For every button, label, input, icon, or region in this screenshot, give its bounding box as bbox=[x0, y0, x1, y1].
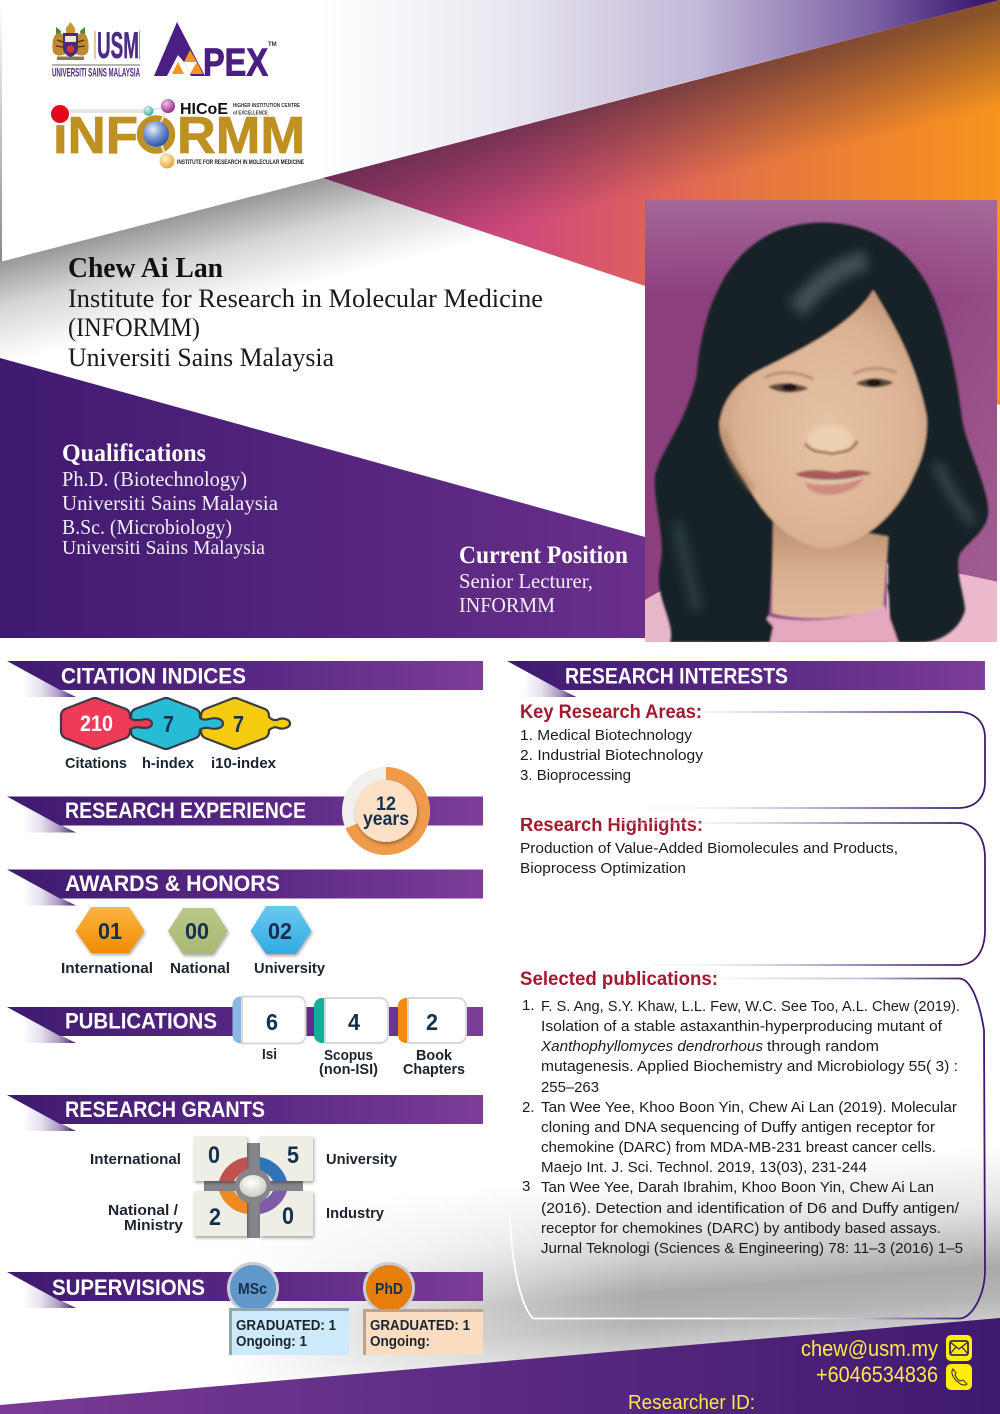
national hexagon bbox=[168, 908, 228, 954]
icon: A triangle bbox=[154, 22, 205, 76]
university value: 5 bbox=[287, 1142, 299, 1169]
area 3: 3. Bioprocessing bbox=[520, 767, 631, 784]
i10-index label: i10-index bbox=[211, 755, 277, 772]
card: ISI bbox=[232, 996, 306, 1044]
teal sphere bbox=[144, 106, 154, 116]
heading: Selected publications: bbox=[520, 969, 718, 990]
section: citation indices bbox=[7, 661, 483, 772]
publication 1: through random bbox=[767, 1038, 879, 1055]
publication 1: Xanthophyllomyces dendrorhous bbox=[540, 1038, 764, 1055]
university name: UNIVERSITI SAINS MALAYSIA bbox=[52, 66, 140, 80]
university value: 02 bbox=[268, 918, 292, 944]
non-ISI label: (non-ISI) bbox=[319, 1061, 378, 1078]
heading: Key Research Areas: bbox=[520, 702, 702, 723]
section: awards and honors bbox=[7, 870, 483, 977]
university hexagon bbox=[250, 906, 312, 954]
MSc text: MSc bbox=[238, 1281, 267, 1298]
area 2: 2. Industrial Biotechnology bbox=[520, 747, 704, 764]
trademark: TM bbox=[268, 42, 277, 48]
grants quadrant chart bbox=[194, 1136, 313, 1238]
ribbon bbox=[7, 870, 483, 906]
publication 3: receptor for chemokines (DARC) by antibody based assays. bbox=[541, 1220, 941, 1237]
university: Universiti Sains Malaysia bbox=[68, 343, 334, 372]
citations label: Citations bbox=[65, 755, 127, 772]
ribbon bbox=[507, 661, 985, 697]
logo: Universiti Sains Malaysia bbox=[52, 22, 140, 80]
PhD ongoing: Ongoing: bbox=[370, 1334, 430, 1350]
international hexagon bbox=[76, 907, 144, 953]
ribbon bbox=[7, 1272, 483, 1308]
PhD degree: Ph.D. (Biotechnology) bbox=[62, 467, 247, 491]
BSc degree: B.Sc. (Microbiology) bbox=[62, 515, 232, 539]
industry value: 0 bbox=[282, 1203, 294, 1230]
i10-index value: 7 bbox=[233, 711, 244, 737]
publication 2: Tan Wee Yee, Khoo Boon Yin, Chew Ai Lan (2019). Molecular bbox=[541, 1099, 957, 1116]
HICoE: HICoE bbox=[180, 101, 228, 118]
heading: AWARDS & HONORS bbox=[65, 871, 280, 896]
background: magenta to orange wedge bbox=[323, 0, 1000, 405]
donut: 12 years bbox=[342, 767, 430, 855]
list number 1: 1. bbox=[522, 997, 535, 1014]
vertical rule left bbox=[94, 31, 96, 59]
BSc university: Universiti Sains Malaysia bbox=[62, 537, 265, 559]
MSc badge bbox=[228, 1264, 278, 1312]
publication 3 bbox=[541, 1179, 963, 1257]
Book label: Book bbox=[416, 1047, 453, 1064]
qualifications heading: Qualifications bbox=[62, 440, 206, 467]
heading: RESEARCH INTERESTS bbox=[565, 664, 788, 688]
publication 3: (2016). Detection and identification of D6 and Duffy antigen/ bbox=[541, 1200, 960, 1217]
box outline bbox=[610, 823, 985, 965]
gold sphere bbox=[160, 154, 174, 168]
heading: Research Highlights: bbox=[520, 815, 703, 836]
PhD badge bbox=[364, 1264, 414, 1312]
university label: University bbox=[326, 1151, 398, 1168]
icon: envelope bbox=[946, 1335, 972, 1361]
international label: International bbox=[90, 1151, 181, 1168]
publication 2: chemokine (DARC) from MDA-MB-231 breast cancer cells. bbox=[541, 1139, 936, 1156]
letters RMM: RMM bbox=[177, 107, 305, 165]
section: publications bbox=[7, 996, 483, 1078]
PhD graduated: GRADUATED: 1 bbox=[370, 1318, 470, 1334]
PhD details bbox=[363, 1309, 483, 1355]
ISI label: Isi bbox=[262, 1046, 277, 1063]
h-index hexagon bbox=[131, 698, 223, 749]
publication 2: Maejo Int. J. Sci. Technol. 2019, 13(03), 231-244 bbox=[541, 1159, 867, 1176]
ribbon bbox=[7, 661, 483, 697]
background: left grey edge strip bbox=[0, 0, 2, 262]
international label: International bbox=[61, 960, 153, 977]
publication 1: 255–263 bbox=[541, 1079, 599, 1096]
publication 1 bbox=[540, 998, 960, 1096]
international value: 0 bbox=[208, 1142, 220, 1169]
heading: PUBLICATIONS bbox=[65, 1008, 217, 1034]
list number 3: 3 bbox=[522, 1178, 530, 1195]
PhD text: PhD bbox=[375, 1281, 403, 1298]
blue sphere bbox=[143, 121, 169, 147]
section: supervisions bbox=[7, 1264, 483, 1355]
area 1: 1. Medical Biotechnology bbox=[520, 727, 693, 744]
university label: University bbox=[254, 960, 326, 977]
red dot bbox=[51, 105, 69, 123]
Scopus value: 4 bbox=[348, 1009, 360, 1035]
magenta sphere bbox=[161, 99, 175, 113]
box outline left bbox=[510, 1215, 700, 1318]
h-index value: 7 bbox=[163, 711, 174, 737]
industry label: Industry bbox=[326, 1205, 385, 1222]
MSc graduated: GRADUATED: 1 bbox=[236, 1318, 336, 1334]
list number 2: 2. bbox=[522, 1099, 535, 1116]
PEX wordmark: PEX bbox=[203, 42, 268, 84]
MSc ongoing: Ongoing: 1 bbox=[236, 1334, 307, 1350]
contact details bbox=[628, 1335, 972, 1414]
institute: Institute for Research in Molecular Medicine bbox=[68, 284, 543, 313]
icon: USM crest bbox=[52, 22, 89, 60]
current position bbox=[459, 542, 628, 617]
heading: RESEARCH GRANTS bbox=[65, 1097, 265, 1122]
ISI value: 6 bbox=[266, 1009, 278, 1035]
name and affiliation bbox=[68, 253, 543, 372]
i10-index hexagon bbox=[201, 698, 290, 749]
section: research experience bbox=[7, 767, 483, 855]
highlight line 2: Bioprocess Optimization bbox=[520, 860, 686, 877]
key research areas bbox=[520, 702, 985, 808]
INFORMM full name: INSTITUTE FOR RESEARCH IN MOLECULAR MEDICINE bbox=[177, 160, 304, 166]
box outline right and top bbox=[700, 978, 985, 1318]
box outline bbox=[650, 712, 985, 808]
letters iNF: iNF bbox=[53, 107, 138, 165]
donut value: 12 bbox=[376, 794, 396, 815]
card: Scopus bbox=[314, 998, 388, 1043]
ribbon bbox=[7, 796, 483, 832]
card: book chapters bbox=[398, 998, 466, 1043]
ribbon bbox=[7, 1095, 483, 1131]
international value: 01 bbox=[98, 918, 122, 944]
selected publications bbox=[510, 969, 985, 1318]
book chapters value: 2 bbox=[426, 1009, 438, 1035]
h-index label: h-index bbox=[142, 755, 195, 772]
hexagon chain bbox=[61, 698, 290, 749]
position unit: INFORMM bbox=[459, 593, 555, 617]
heading: RESEARCH EXPERIENCE bbox=[65, 798, 306, 823]
section: research interests bbox=[507, 661, 985, 1318]
national value: 00 bbox=[185, 918, 209, 944]
PhD university: Universiti Sains Malaysia bbox=[62, 491, 279, 515]
background: purple footer band bbox=[0, 1318, 1000, 1414]
grey divider bbox=[52, 64, 140, 66]
molecule links bbox=[148, 106, 168, 161]
citations value: 210 bbox=[80, 711, 113, 736]
position title: Senior Lecturer, bbox=[459, 569, 593, 593]
citations hexagon bbox=[61, 698, 152, 749]
ministry label: Ministry bbox=[124, 1217, 184, 1234]
icon: telephone bbox=[946, 1364, 972, 1390]
national label: National bbox=[170, 960, 230, 977]
Scopus label: Scopus bbox=[324, 1047, 373, 1064]
background: grey shadow wedge bbox=[0, 178, 645, 537]
qualifications bbox=[62, 440, 279, 559]
highlight line 1: Production of Value-Added Biomolecules and Products, bbox=[520, 840, 898, 857]
background: top lavender to purple triangle bbox=[0, 0, 1000, 262]
logo: INFORMM HICoE bbox=[51, 99, 305, 168]
MSc details bbox=[229, 1308, 349, 1355]
publication 2: cloning and DNA sequencing of Duffy antigen receptor for bbox=[541, 1119, 935, 1136]
background: purple header panel bbox=[0, 358, 645, 638]
donut unit: years bbox=[363, 809, 409, 830]
heading: CITATION INDICES bbox=[61, 664, 246, 688]
logo: APEX bbox=[154, 22, 277, 84]
background: wedge top shadow bbox=[323, 0, 1000, 405]
Chapters label: Chapters bbox=[403, 1061, 465, 1078]
section: research grants bbox=[7, 1095, 483, 1238]
publication 1: mutagenesis. Applied Biochemistry and Microbiology 55( 3) : bbox=[541, 1058, 958, 1075]
position heading: Current Position bbox=[459, 542, 628, 569]
email: chew@usm.my bbox=[801, 1336, 938, 1361]
ribbon bbox=[7, 1007, 483, 1043]
name: Chew Ai Lan bbox=[68, 253, 223, 284]
publication 1: Isolation of a stable astaxanthin-hyperproducing mutant of bbox=[541, 1018, 943, 1035]
publication 3: Tan Wee Yee, Darah Ibrahim, Khoo Boon Yin, Chew Ai Lan bbox=[541, 1179, 934, 1196]
publication 1: F. S. Ang, S.Y. Khaw, L.L. Few, W.C. See Too, A.L. Chew (2019). bbox=[541, 998, 960, 1015]
institute abbreviation: (INFORMM) bbox=[68, 313, 200, 342]
phone: +6046534836 bbox=[816, 1362, 938, 1387]
publication 2 bbox=[541, 1099, 957, 1176]
national label: National / bbox=[108, 1202, 179, 1219]
USM wordmark: USM bbox=[97, 25, 139, 66]
grey bar bbox=[66, 109, 146, 113]
portrait photo bbox=[645, 200, 997, 642]
national value: 2 bbox=[209, 1204, 221, 1231]
HICoE tagline 1: HIGHER INSTITUTION CENTRE bbox=[233, 103, 300, 109]
researcher id: Researcher ID: bbox=[628, 1392, 755, 1414]
heading: SUPERVISIONS bbox=[52, 1275, 205, 1300]
HICoE tagline 2: of EXCELLENCE bbox=[233, 110, 268, 116]
research highlights bbox=[520, 815, 985, 965]
letter O ring bbox=[140, 118, 172, 150]
publication 3: Jurnal Teknologi (Sciences & Engineering) 78: 11–3 (2016) 1–5 bbox=[541, 1240, 963, 1257]
background: lower grey shading bbox=[276, 1161, 1000, 1378]
vertical rule right bbox=[139, 31, 140, 59]
